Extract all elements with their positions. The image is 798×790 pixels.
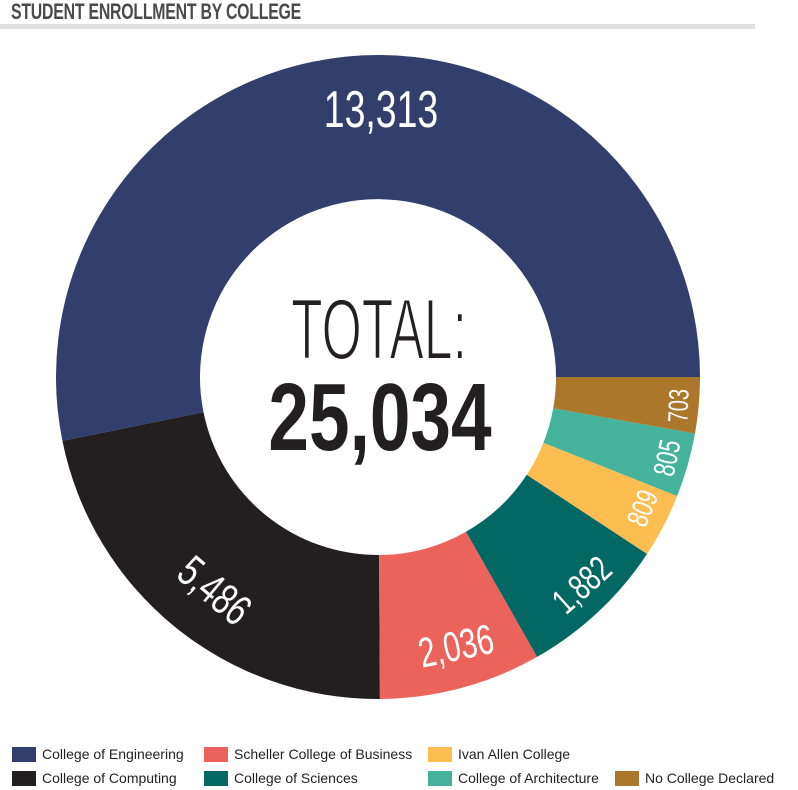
center: total value: 25,034 (268, 364, 492, 471)
label: 13,313: 13,313 (324, 80, 438, 138)
legend: no college: No College Declared (645, 770, 774, 786)
segment: computing (62, 412, 380, 699)
segment: no college (553, 377, 700, 434)
segment: architecture (543, 408, 695, 496)
label: 5,486: 5,486 (168, 547, 260, 635)
legend: computing: College of Computing (42, 770, 177, 786)
label: 703: 703 (663, 388, 695, 423)
segment: business (379, 532, 537, 699)
label: 809: 809 (620, 485, 665, 531)
legend: business: Scheller College of Business (234, 746, 412, 762)
label: 805: 805 (646, 437, 687, 479)
segment: sciences (466, 475, 647, 657)
legend: engineering: College of Engineering (42, 746, 184, 762)
label: 2,036: 2,036 (414, 615, 498, 677)
legend: ivan allen: Ivan Allen College (458, 746, 570, 762)
center: total label: TOTAL: (291, 283, 467, 378)
legend: architecture: College of Architecture (458, 770, 599, 786)
legend: sciences: College of Sciences (234, 770, 358, 786)
segment: ivan allen (527, 443, 677, 554)
segment: engineering (56, 55, 700, 441)
label: 1,882: 1,882 (544, 548, 619, 622)
